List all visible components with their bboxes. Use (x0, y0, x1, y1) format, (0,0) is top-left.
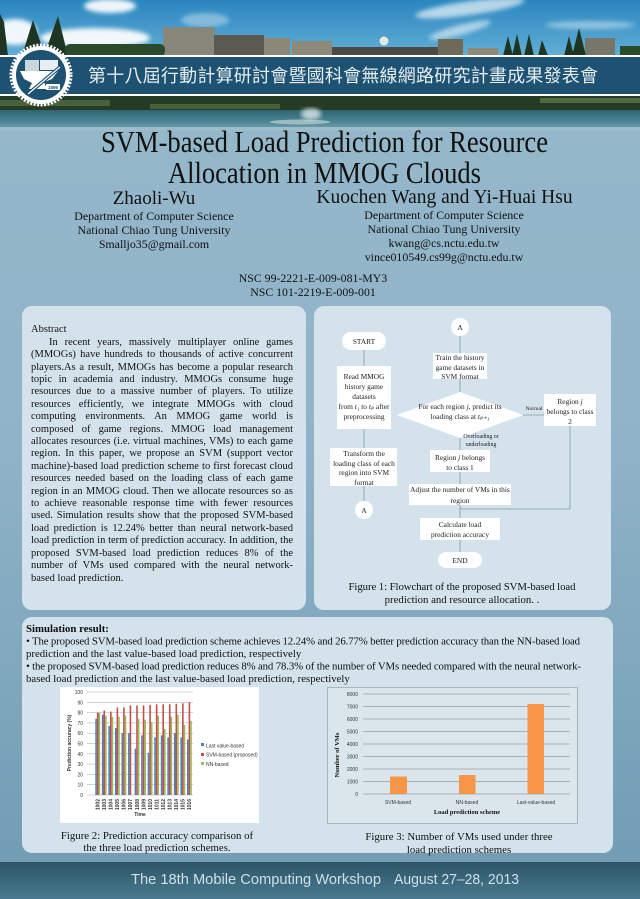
flowchart labels: underloading (466, 442, 496, 448)
legend: Last value-based (206, 744, 244, 750)
x axis labels: 1015 (181, 799, 187, 810)
figure 1 caption (348, 581, 576, 606)
flowchart labels: prediction accuracy (431, 530, 489, 539)
x axis labels: 1011 (154, 799, 160, 810)
footer text: The 18th Mobile Computing Workshop (131, 872, 381, 888)
flowchart labels: Adjust the number of VMs in this (410, 485, 510, 494)
author block right: National Chiao Tung University (368, 222, 521, 236)
abstract text: proposed SVM-based load prediction reduces 8% of the (31, 548, 293, 559)
panel: flowchart (314, 306, 611, 610)
y axis labels: 4000 (347, 742, 358, 748)
footer text (131, 872, 519, 888)
chart: prediction accuracy (60, 687, 259, 823)
footer band (0, 862, 640, 899)
abstract text: resources due to a massive number of players. To utilize (31, 386, 293, 397)
y axis labels: 40 (77, 752, 83, 758)
figure 2 caption: the three load prediction schemes. (83, 842, 231, 854)
abstract text: players.As a result, MMOGs has become a popular research (31, 362, 293, 373)
poster title: SVM-based Load Prediction for Resource (101, 124, 548, 159)
x axis labels: 1013 (168, 799, 174, 810)
x axis labels: 1004 (109, 799, 115, 810)
flowchart labels: A (361, 506, 367, 515)
abstract text: machine)-based load prediction scheme to first forecast cloud (31, 461, 293, 472)
flowchart labels: Transform the (343, 449, 386, 458)
poster title (101, 124, 548, 190)
y axis labels: 10 (77, 783, 83, 789)
icon: university logo (11, 45, 71, 105)
simulation text: • the proposed SVM-based load prediction reduces 8% and 78.3% of the number of VMs needed compared with the neural network- (26, 660, 581, 672)
abstract text: resources needed based on the loading class of each game (31, 473, 293, 484)
panel: simulation result (22, 617, 613, 856)
y axis labels: 30 (77, 762, 83, 768)
y axis labels: 60 (77, 731, 83, 737)
flowchart labels: START (353, 337, 376, 346)
flowchart labels: END (452, 556, 468, 565)
flowchart labels: region (451, 496, 470, 505)
y axis labels: 0 (355, 792, 358, 798)
chart: number of VMs (328, 688, 578, 824)
y axis labels: 50 (77, 742, 83, 748)
series: last value based (95, 715, 189, 795)
legend: SVM-based (proposed) (206, 752, 258, 758)
abstract text: Abstract (31, 324, 67, 335)
y axis labels: 90 (77, 700, 83, 706)
abstract text: to achieve reasonable response time with fewer resources (31, 498, 293, 509)
x axis labels: 1007 (128, 799, 134, 810)
author block right: Kuochen Wang and Yi-Huai Hsu (316, 187, 573, 208)
x axis labels: 1005 (115, 799, 121, 810)
abstract text (31, 324, 293, 584)
y axis labels: 0 (80, 793, 83, 799)
flowchart labels: belongs to class (547, 407, 594, 416)
flowchart labels: Region j belongs (435, 453, 485, 462)
y axis labels: 1000 (347, 780, 358, 786)
y axis labels: 7000 (347, 704, 358, 710)
abstract text: computing environments. An MMOG game world is (31, 411, 293, 422)
flowchart labels: preprocessing (343, 412, 385, 421)
flowchart labels: Overloading or (463, 434, 499, 440)
figure 3 caption (365, 831, 553, 856)
abstract text: based load prediction. (31, 573, 123, 584)
flowchart labels: SVM format (441, 372, 480, 381)
x axis labels: 1010 (148, 799, 154, 810)
abstract text: composed of game regions. MMOG load management (31, 424, 293, 435)
x axis labels: 1008 (135, 799, 141, 810)
x axis labels: 1016 (187, 799, 193, 810)
panel: abstract (22, 306, 306, 610)
grant numbers: NSC 101-2219-E-009-001 (250, 285, 376, 299)
y axis title: Number of VMs (334, 732, 341, 777)
abstract text: In recent years, massively multiplayer online games (49, 337, 293, 348)
abstract text: region in an MMOG cloud. Then we allocate resources so as (31, 486, 293, 497)
flowchart labels: For each region j, predict its (418, 402, 502, 411)
category labels (385, 800, 555, 806)
y axis labels: 8000 (347, 692, 358, 698)
abstract text: region. In this paper, we propose an SVM (support vector (31, 448, 293, 459)
legend: NN-based (206, 762, 229, 768)
simulation text: based load prediction and the last value-based load prediction, respectively (26, 673, 350, 685)
clouds (0, 0, 635, 48)
header band (0, 55, 640, 96)
figure 1 caption: Figure 1: Flowchart of the proposed SVM-based load (348, 581, 576, 593)
simulation text (26, 623, 581, 685)
x axis labels: 1006 (122, 799, 128, 810)
y axis labels: 5000 (347, 730, 358, 736)
flowchart nodes (330, 318, 596, 568)
flowchart labels: 2 (568, 417, 572, 426)
grant numbers (239, 271, 387, 299)
flowchart labels: loading class at tₚ₊₁ (430, 412, 490, 421)
flowchart labels: region into SVM (339, 468, 389, 477)
figure 3 caption: load prediction schemes (407, 844, 511, 856)
flowchart labels (333, 323, 594, 565)
figure 3 caption: Figure 3: Number of VMs used under three (365, 831, 553, 843)
y axis labels: 6000 (347, 717, 358, 723)
author block left: National Chiao Tung University (78, 223, 231, 237)
flowchart labels: from t₁ to tₚ after (339, 402, 390, 411)
abstract text: load prediction is 12.24% better than neural network-based (31, 523, 293, 534)
figure 2 caption (61, 830, 253, 854)
flowchart labels: history game (345, 382, 384, 391)
flowchart labels: Train the history (436, 353, 485, 362)
x axis labels: 1003 (102, 799, 108, 810)
y axis labels: 80 (77, 711, 83, 717)
trees (0, 14, 640, 56)
flowchart labels: game datasets in (436, 363, 485, 372)
poster title: Allocation in MMOG Clouds (168, 155, 481, 190)
abstract text: topic in academia and industry. MMOGs consume huge (31, 374, 293, 385)
y axis labels: 20 (77, 772, 83, 778)
lake shore and water (0, 95, 640, 113)
x axis title: Load prediction scheme (434, 809, 500, 816)
y axis labels: 2000 (347, 767, 358, 773)
y axis labels: 100 (75, 690, 83, 696)
y axis title: Prediction accuracy (%) (67, 714, 73, 771)
abstract text: used. Simulation results show that the proposed SVM-based (31, 510, 293, 521)
y axis labels: 3000 (347, 754, 358, 760)
flowchart labels: to class 1 (446, 463, 474, 472)
author block right: vince010549.cs99g@nctu.edu.tw (365, 250, 524, 264)
icon: university logo: 1896 (48, 85, 59, 90)
flowchart labels: Calculate load (439, 520, 482, 529)
x axis labels: 1002 (96, 799, 102, 810)
flowchart labels: A (457, 323, 463, 332)
bars (390, 704, 544, 794)
x axis labels (96, 799, 193, 810)
legend (201, 743, 258, 768)
grant numbers: NSC 99-2221-E-009-081-MY3 (239, 271, 387, 285)
flowchart labels: format (354, 478, 375, 487)
flowchart labels: Region j (557, 397, 583, 406)
author block left: Department of Computer Science (74, 209, 234, 223)
abstract text: number of VMs used compared with the neural network- (31, 560, 293, 571)
flowchart labels: Read MMOG (344, 372, 385, 381)
abstract text: (MMOGs) have hundreds to thousands of active concurrent (31, 349, 293, 360)
flowchart labels: loading class of each (333, 459, 395, 468)
footer text: August 27–28, 2013 (394, 872, 519, 888)
author block left: Zhaoli-Wu (113, 188, 196, 209)
x axis title: Time (134, 812, 146, 818)
simulation text: prediction and the last value-based load prediction, respectively (26, 648, 302, 660)
author block left: Smalljo35@gmail.com (99, 237, 210, 251)
figure 1 caption: prediction and resource allocation. . (385, 594, 539, 606)
flowchart labels: datasets (352, 392, 376, 401)
category labels: Last-value-based (517, 800, 555, 806)
author block left (74, 188, 234, 251)
x axis labels: 1012 (161, 799, 167, 810)
header photo (0, 0, 640, 131)
buildings (163, 27, 615, 56)
category labels: NN-based (456, 800, 478, 806)
y axis labels (75, 690, 83, 799)
y axis labels: 70 (77, 721, 83, 727)
author block right: kwang@cs.nctu.edu.tw (388, 236, 500, 250)
header title chinese: 第十八屆行動計算研討會暨國科會無線網路研究計畫成果發表會 (88, 66, 598, 86)
abstract text: resources efficiently, we integrate MMOGs with cloud (31, 399, 293, 410)
author block right: Department of Computer Science (364, 208, 524, 222)
x axis labels: 1014 (174, 799, 180, 810)
category labels: SVM-based (385, 800, 411, 806)
flowchart connectors (364, 336, 570, 552)
abstract text: allocates resources (i.e. virtual machines, VMs) to each game (31, 436, 293, 447)
y axis labels (347, 692, 358, 798)
simulation text: Simulation result: (26, 623, 109, 635)
abstract text: load prediction in term of prediction accuracy. In addition, the (31, 535, 293, 546)
x axis labels: 1009 (141, 799, 147, 810)
figure 2 caption: Figure 2: Prediction accuracy comparison of (61, 830, 253, 842)
series: svm based (97, 702, 190, 795)
author block right (316, 187, 573, 264)
gridlines (87, 692, 193, 795)
series: nn based (98, 713, 192, 795)
gridlines (363, 694, 570, 794)
simulation text: • The proposed SVM-based load prediction scheme achieves 12.24% and 26.77% better prediction accuracy than the NN-based load (26, 636, 581, 648)
flowchart labels: Normal (525, 406, 543, 412)
